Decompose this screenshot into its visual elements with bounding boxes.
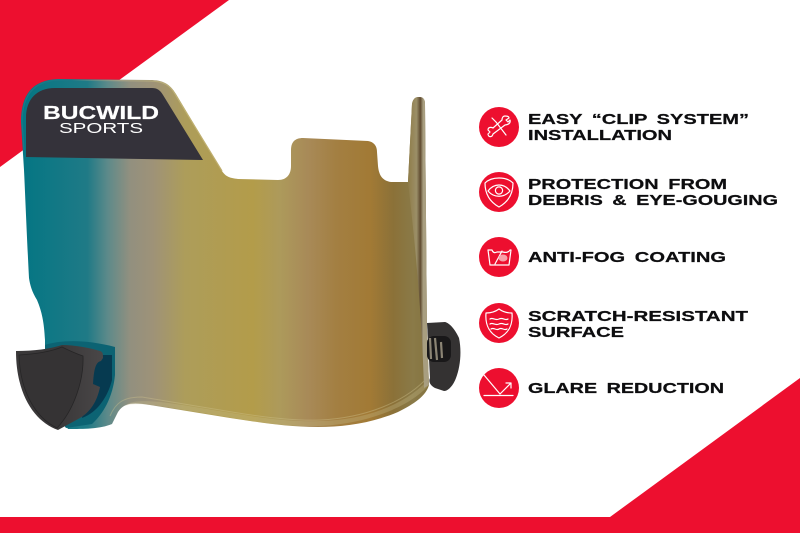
logo	[43, 102, 159, 137]
feature: anti-fog	[479, 237, 726, 277]
icon: eye in shield	[479, 172, 519, 212]
label: ANTI-FOG COATING	[528, 250, 726, 266]
icon: fogged visor	[479, 237, 519, 277]
red corner: bottom right with base bar	[0, 378, 800, 533]
left clip	[16, 341, 115, 430]
icon: shield with waves	[479, 303, 519, 343]
logo plate	[26, 88, 203, 160]
label: GLARE REDUCTION	[528, 381, 724, 397]
label: EASY “CLIP SYSTEM”	[528, 112, 749, 128]
clip opening	[427, 336, 451, 362]
clip backing	[45, 341, 115, 428]
label: SCRATCH-RESISTANT	[528, 309, 748, 325]
clip body	[16, 345, 103, 430]
icon: reflected ray	[479, 368, 519, 408]
visor lens	[21, 79, 429, 429]
visor lower rim	[110, 378, 427, 420]
label: INSTALLATION	[528, 128, 672, 144]
logo: SPORTS: SPORTS	[59, 120, 143, 137]
right side flange	[408, 97, 429, 388]
feature: glare	[479, 368, 724, 408]
right clip	[427, 322, 460, 391]
feature: protection	[479, 172, 778, 212]
label: PROTECTION FROM	[528, 177, 727, 193]
feature: clip system	[479, 107, 749, 147]
visor rim highlight	[22, 80, 222, 171]
logo: BUCWILD: BUCWILD	[43, 102, 159, 123]
feature: scratch resistant	[479, 303, 748, 343]
label: DEBRIS & EYE-GOUGING	[528, 193, 778, 209]
clip shield face	[19, 347, 83, 428]
red corner: top left	[0, 0, 229, 167]
visor product image	[21, 79, 429, 429]
label: SURFACE	[528, 325, 624, 341]
icon: wrench and screwdriver	[479, 107, 519, 147]
